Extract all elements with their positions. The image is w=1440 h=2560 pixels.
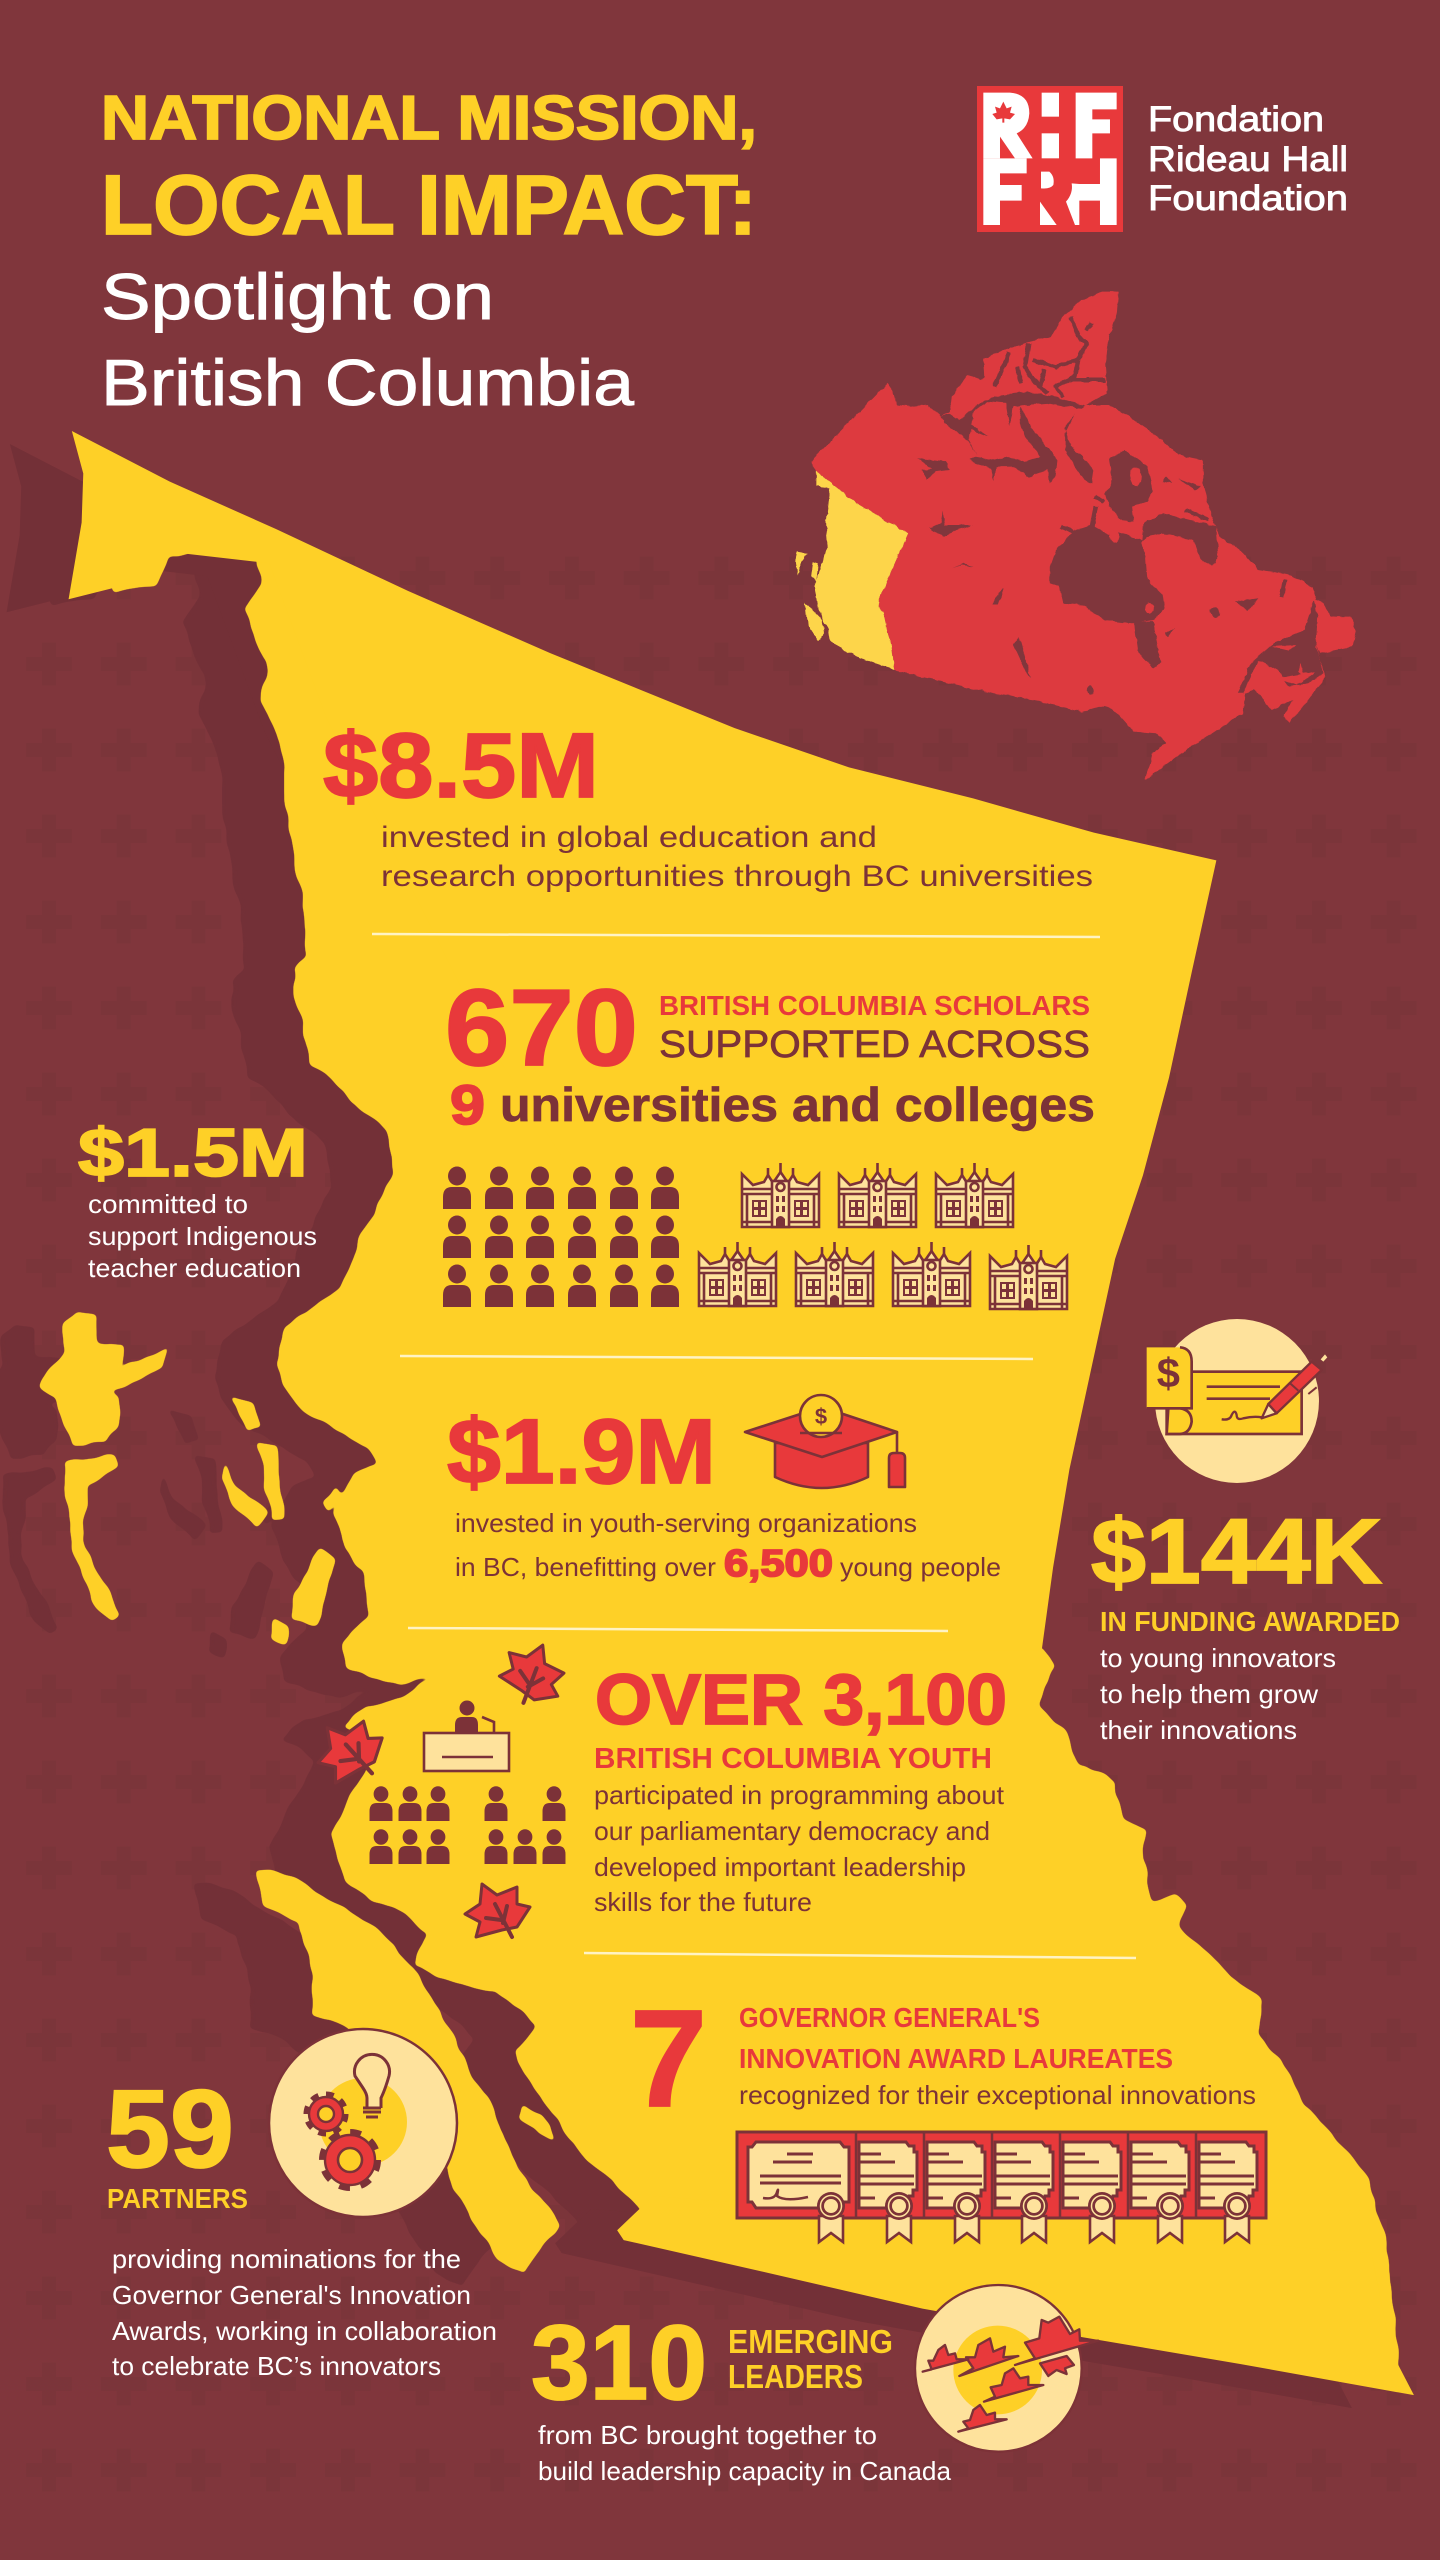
stat: $1.5M: teacher education — [88, 1253, 301, 1283]
stat: $1.9M: in BC, benefitting over — [455, 1552, 716, 1582]
icon: maple leaf — [465, 1884, 530, 1937]
stat: 59 partners: 59 — [106, 2068, 234, 2191]
stat: 7 laureates: INNOVATION AWARD LAUREATES — [739, 2043, 1173, 2074]
stat: over 3,100 youth: developed important leadership — [594, 1852, 966, 1882]
icon: cheque and pen circle: $ — [1157, 1349, 1180, 1396]
stat: 59 partners — [106, 2068, 497, 2381]
stat: $1.9M: 6,500 — [724, 1543, 833, 1585]
stat: 59 partners: PARTNERS — [107, 2183, 248, 2214]
stat: 59 partners: to celebrate BC’s innovators — [112, 2351, 441, 2381]
map: British Columbia — [39, 431, 1414, 2395]
icon: speaker at podium — [424, 1700, 509, 1771]
logo: Foundation — [1148, 179, 1348, 218]
stat: 7 laureates: GOVERNOR GENERAL'S — [739, 2002, 1040, 2033]
stat: $144K: to help them grow — [1100, 1679, 1318, 1709]
stat: $1.5M: $1.5M — [78, 1115, 308, 1191]
icon: maple leaf — [492, 1632, 575, 1716]
stat: $8.5M: invested in global education and — [381, 821, 877, 854]
stat: 7 laureates — [630, 1982, 1256, 2136]
icon: row of certificates — [737, 2132, 1266, 2242]
icon: rising maple leaves circle — [915, 2285, 1098, 2452]
title — [101, 84, 757, 419]
icon: audience — [370, 1786, 565, 1864]
stat: 670 scholars — [445, 967, 1095, 1136]
stat: 59 partners: Awards, working in collaboration — [112, 2316, 497, 2346]
stat: $1.9M: $1.9M — [447, 1401, 716, 1503]
stat: over 3,100 youth: our parliamentary democracy and — [594, 1816, 990, 1846]
stat: 310 emerging leaders: EMERGING — [728, 2323, 893, 2360]
icon: gears and light bulb circle — [269, 2029, 457, 2217]
stat: 7 laureates: recognized for their exceptional innovations — [739, 2080, 1256, 2110]
stat: 670 scholars: SUPPORTED ACROSS — [659, 1024, 1090, 1066]
stat: $1.5M: committed to — [88, 1189, 248, 1219]
logo: Fondation — [1148, 100, 1324, 139]
title: British Columbia — [101, 346, 635, 419]
stat: over 3,100 youth: OVER 3,100 — [595, 1661, 1007, 1740]
stat: $1.5M: support Indigenous — [88, 1221, 317, 1251]
stat: $1.5M — [78, 1115, 317, 1283]
map: British Columbia shadow — [0, 444, 1352, 2408]
stat: 670 scholars: 670 — [445, 967, 638, 1089]
stat: $8.5M — [323, 715, 1093, 893]
stat: $1.9M: young people — [840, 1552, 1001, 1582]
stat: 670 scholars: universities and colleges — [500, 1078, 1095, 1131]
stat: $144K: their innovations — [1100, 1715, 1297, 1745]
stat: $1.9M — [447, 1401, 1001, 1585]
stat: 670 scholars: BRITISH COLUMBIA SCHOLARS — [659, 990, 1090, 1021]
stat: $144K: to young innovators — [1100, 1643, 1336, 1673]
stat: $144K: IN FUNDING AWARDED — [1100, 1606, 1400, 1637]
logo — [977, 86, 1348, 232]
icon: graduation cap with coin: $ — [815, 1404, 827, 1429]
logo: Rideau Hall — [1148, 140, 1348, 179]
title: LOCAL IMPACT: — [101, 158, 757, 252]
stat: 59 partners: providing nominations for the — [112, 2244, 461, 2274]
stat: $144K — [1091, 1501, 1400, 1745]
stat: over 3,100 youth: skills for the future — [594, 1887, 812, 1917]
background cross pattern — [0, 535, 1440, 2525]
title: Spotlight on — [101, 260, 494, 333]
stat: $1.9M: invested in youth-serving organizations — [455, 1508, 917, 1538]
stat: 310 emerging leaders: build leadership capacity in Canada — [538, 2456, 952, 2486]
stat: 7 laureates: 7 — [630, 1982, 707, 2136]
stat: 670 scholars: 9 — [450, 1073, 485, 1136]
stat: over 3,100 youth — [594, 1661, 1007, 1917]
stat: over 3,100 youth: BRITISH COLUMBIA YOUTH — [594, 1743, 992, 1775]
stat: 310 emerging leaders: LEADERS — [728, 2358, 863, 2395]
stat: 59 partners: Governor General's Innovation — [112, 2280, 471, 2310]
icon: maple leaf — [310, 1715, 390, 1786]
stat: $144K: $144K — [1091, 1501, 1382, 1603]
stat: 310 emerging leaders: 310 — [531, 2304, 707, 2422]
icon: cheque and pen circle — [1147, 1319, 1327, 1483]
icon: graduation cap with coin — [745, 1395, 905, 1488]
icon: grid of scholars — [443, 1166, 679, 1307]
stat: $8.5M: research opportunities through BC universities — [381, 860, 1093, 893]
stat: 310 emerging leaders: from BC brought together to — [538, 2420, 877, 2450]
stat: $8.5M: $8.5M — [323, 715, 599, 817]
stat: over 3,100 youth: participated in programming about — [594, 1780, 1005, 1810]
title: NATIONAL MISSION, — [101, 84, 757, 153]
stat: 310 emerging leaders — [531, 2304, 952, 2486]
map: Canada with BC highlighted — [795, 292, 1356, 780]
icon: university buildings — [699, 1163, 1067, 1309]
